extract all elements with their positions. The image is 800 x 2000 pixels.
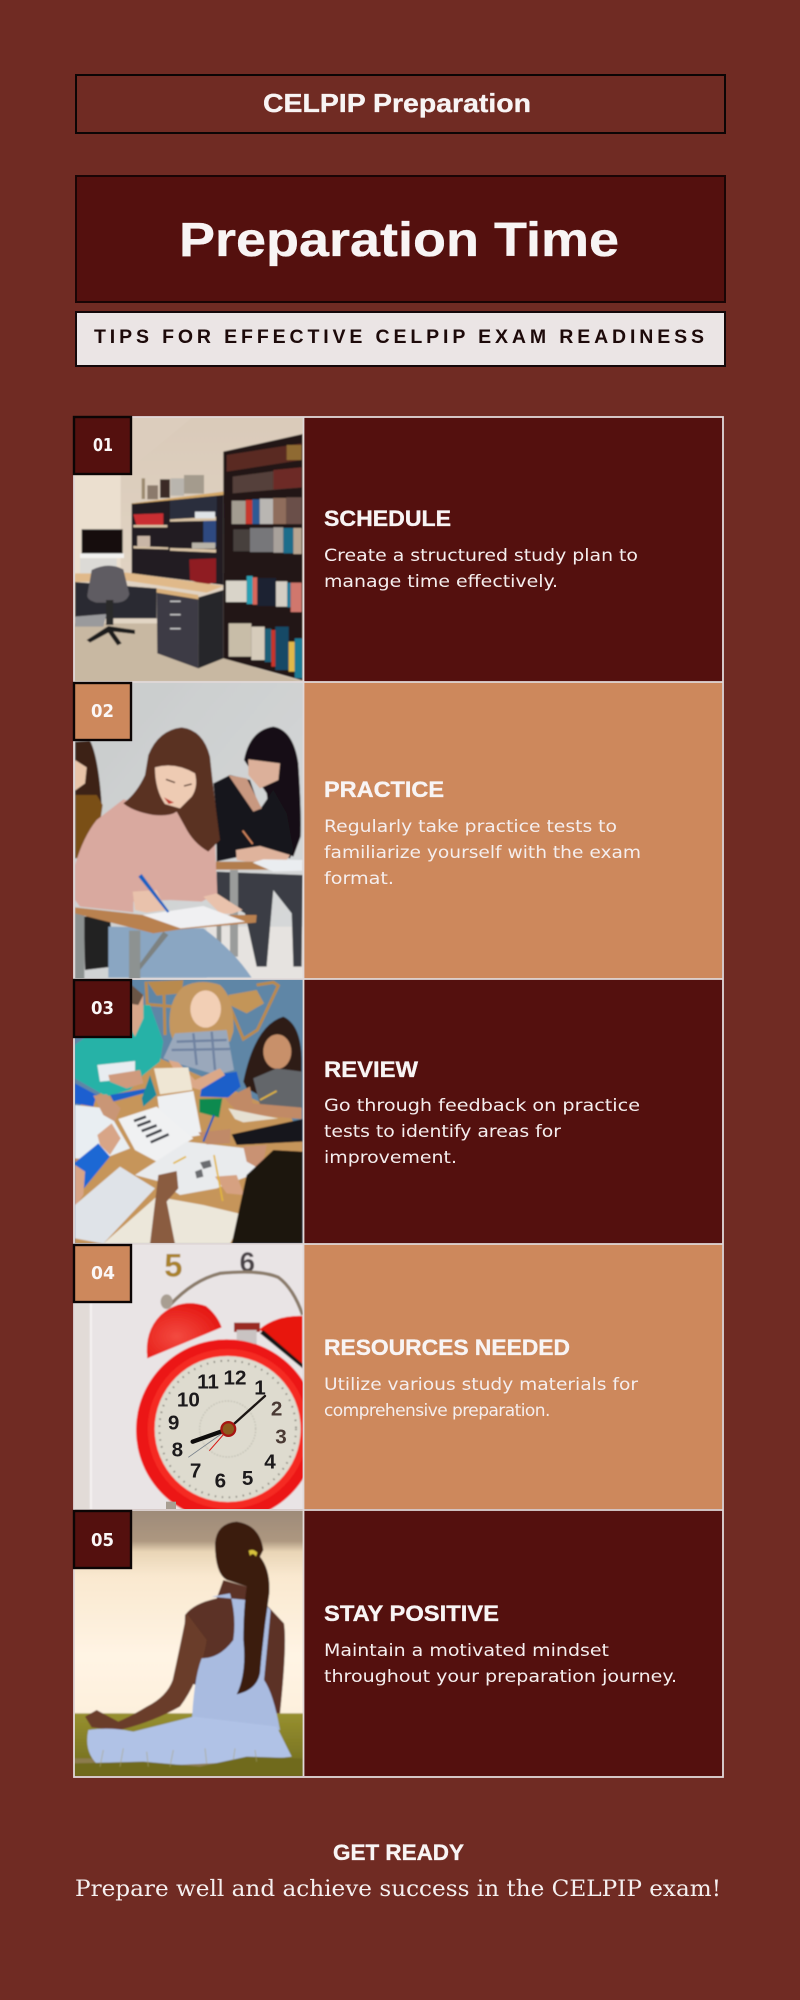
footer text: closing line: Prepare well and achieve success in the CELPIP exam! — [75, 1876, 721, 1902]
clock numerals — [168, 1367, 287, 1493]
clock numerals: 7 — [190, 1459, 201, 1482]
header: CELPIP Preparation — [76, 75, 725, 133]
subtitle: tips banner — [76, 312, 725, 366]
body: review: tests to identify areas for — [324, 1122, 561, 1142]
heading: practice: PRACTICE — [324, 777, 444, 802]
body: resources needed: Utilize various study materials for — [324, 1375, 638, 1395]
panel: step 01 schedule — [60, 410, 722, 710]
badge: 01 — [74, 417, 131, 474]
panel: step 05 stay positive — [60, 1509, 722, 1777]
title: Preparation Time — [76, 176, 725, 302]
panel: step 04 resources needed — [60, 1240, 722, 1540]
clock numerals: 8 — [172, 1439, 183, 1462]
clock numerals: 3 — [275, 1425, 287, 1448]
body: review: improvement. — [324, 1148, 457, 1168]
heading: resources needed: RESOURCES NEEDED — [324, 1335, 570, 1360]
clock numerals: 5 — [242, 1467, 253, 1490]
clock numerals: 4 — [264, 1451, 276, 1474]
badge: 04: 04 — [91, 1263, 115, 1284]
body: practice — [324, 817, 641, 889]
photo: students writing an exam — [74, 682, 303, 978]
clock numerals: 11 — [197, 1371, 219, 1394]
text panel: review — [304, 979, 722, 1244]
clock numerals: 6 — [215, 1470, 226, 1493]
body: schedule: manage time effectively. — [324, 572, 558, 592]
body: stay positive — [324, 1641, 677, 1687]
text panel: schedule — [304, 417, 722, 682]
text panel: resources needed — [304, 1244, 722, 1509]
clock numerals: 9 — [168, 1411, 179, 1434]
body: stay positive: Maintain a motivated mindset — [324, 1641, 609, 1661]
badge: 05 — [74, 1511, 131, 1568]
text panel: stay positive — [304, 1510, 722, 1776]
body: stay positive: throughout your preparation journey. — [324, 1667, 677, 1687]
clock numerals: 1 — [254, 1377, 266, 1400]
body: resources needed: comprehensive preparation. — [324, 1401, 550, 1421]
clock numerals: 10 — [177, 1389, 200, 1412]
header: CELPIP Preparation: CELPIP Preparation — [263, 88, 531, 118]
body: practice: format. — [324, 869, 394, 889]
clock numerals: 12 — [224, 1367, 246, 1390]
body: resources needed — [324, 1375, 638, 1421]
body: schedule — [324, 546, 638, 592]
body: practice: familiarize yourself with the exam — [324, 843, 641, 863]
badge: 03: 03 — [91, 998, 114, 1019]
photo: red alarm clock — [74, 1244, 303, 1509]
body: practice: Regularly take practice tests to — [324, 817, 617, 837]
footer heading: get ready: GET READY — [333, 1840, 464, 1865]
photo: red alarm clock: 5 — [164, 1247, 182, 1284]
heading: schedule: SCHEDULE — [324, 506, 451, 531]
body: review — [324, 1096, 640, 1168]
badge: 01: 01 — [93, 435, 113, 456]
heading: review: REVIEW — [324, 1057, 418, 1082]
body: review: Go through feedback on practice — [324, 1096, 640, 1116]
subtitle: tips banner: TIPS FOR EFFECTIVE CELPIP EXAM READINESS — [94, 326, 704, 348]
clock numerals: 2 — [271, 1398, 282, 1421]
badge: 05: 05 — [91, 1530, 114, 1551]
photo: woman meditating at sunset — [74, 1509, 303, 1776]
photo: study group around a table — [74, 980, 303, 1244]
badge: 02 — [74, 683, 131, 740]
badge: 03 — [74, 980, 131, 1037]
badge: 02: 02 — [91, 701, 114, 722]
panel: step 03 review — [60, 975, 722, 1275]
photo: home study desk and bookcase — [74, 418, 303, 682]
title: Preparation Time: Preparation Time — [179, 214, 619, 267]
clock hands — [166, 1396, 265, 1510]
photo: red alarm clock: 6 — [240, 1247, 255, 1278]
text panel: practice — [304, 682, 722, 979]
body: schedule: Create a structured study plan to — [324, 546, 638, 566]
panel: step 02 practice — [60, 680, 722, 997]
badge: 04 — [74, 1245, 131, 1302]
heading: stay positive: STAY POSITIVE — [324, 1601, 499, 1626]
